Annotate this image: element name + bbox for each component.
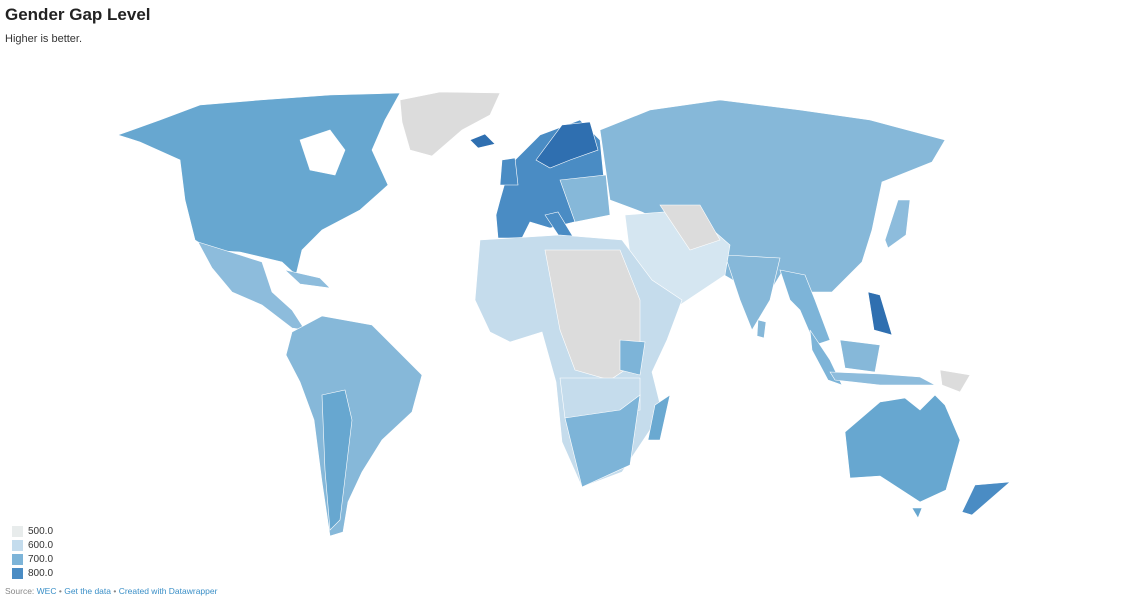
region: central america bbox=[198, 242, 305, 330]
region: caribbean bbox=[285, 270, 330, 288]
region: north america bbox=[118, 93, 400, 275]
legend: 500.0 bbox=[28, 526, 53, 536]
legend: 600.0 bbox=[28, 540, 53, 550]
region: russia and asia bbox=[600, 100, 945, 385]
subtitle: Higher is better. bbox=[5, 33, 82, 45]
legend: 800.0 bbox=[28, 568, 53, 578]
region: oceania bbox=[830, 370, 1010, 518]
title: Gender Gap Level bbox=[5, 5, 150, 24]
region: middle east bbox=[625, 205, 730, 315]
source note: Source: WEC • Get the data • Created with Datawrapper bbox=[5, 586, 217, 596]
legend bbox=[12, 526, 53, 579]
region: south america bbox=[286, 316, 422, 536]
region: europe bbox=[470, 120, 610, 245]
region: japan bbox=[885, 200, 910, 248]
region: africa bbox=[475, 235, 682, 487]
region: greenland bbox=[400, 92, 500, 156]
legend: 700.0 bbox=[28, 554, 53, 564]
